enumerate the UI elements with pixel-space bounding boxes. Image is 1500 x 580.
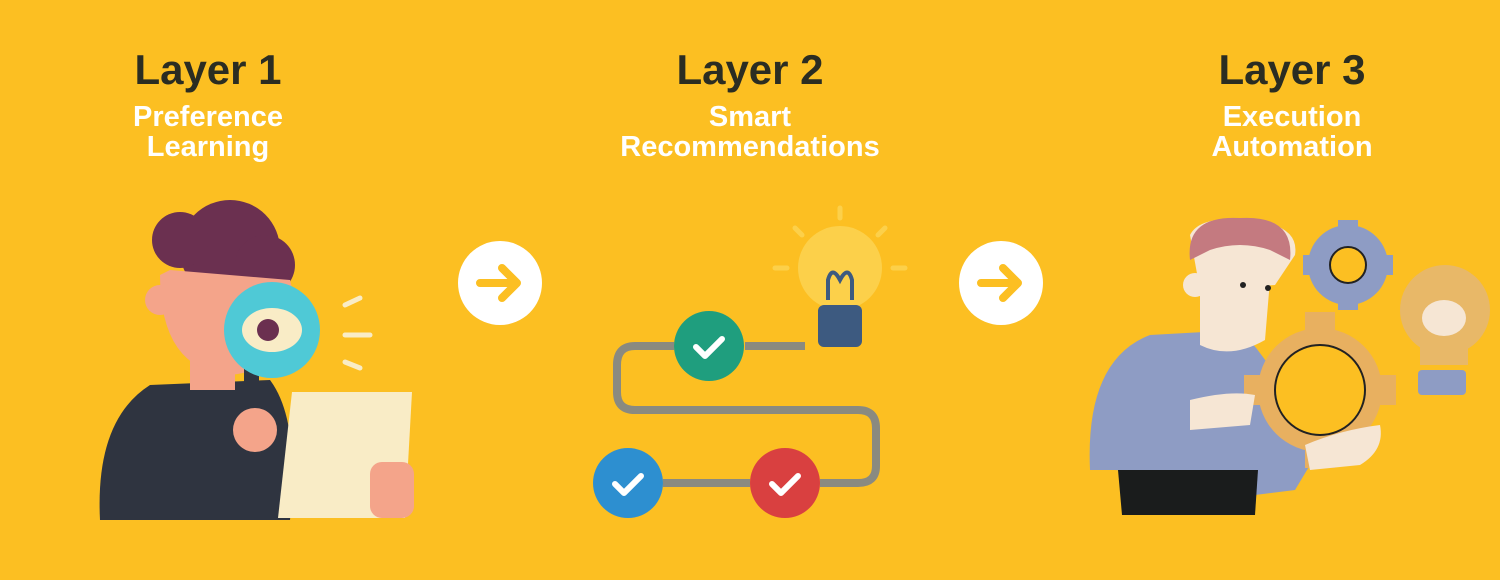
heading: layer 1: Layer 1 (134, 46, 282, 93)
heading: layer 1 (133, 46, 283, 163)
heading: layer 1: Learning (147, 131, 269, 163)
illustration: path with checkpoints and bulb (593, 208, 905, 518)
heading: layer 3: Automation (1211, 131, 1373, 163)
heading: layer 2: Recommendations (620, 131, 880, 163)
arrow 2 (959, 241, 1043, 325)
heading: layer 3: Layer 3 (1218, 46, 1366, 93)
heading: layer 1: Preference (133, 101, 283, 133)
heading: layer 2 (620, 46, 880, 163)
heading: layer 3 (1211, 46, 1373, 163)
illustration: person with magnifier (100, 200, 414, 520)
heading: layer 2: Smart (709, 101, 791, 133)
heading: layer 3: Execution (1223, 101, 1361, 133)
illustration: person with gears and brain bulb (1090, 218, 1490, 515)
arrow 1 (458, 241, 542, 325)
heading: layer 2: Layer 2 (676, 46, 824, 93)
